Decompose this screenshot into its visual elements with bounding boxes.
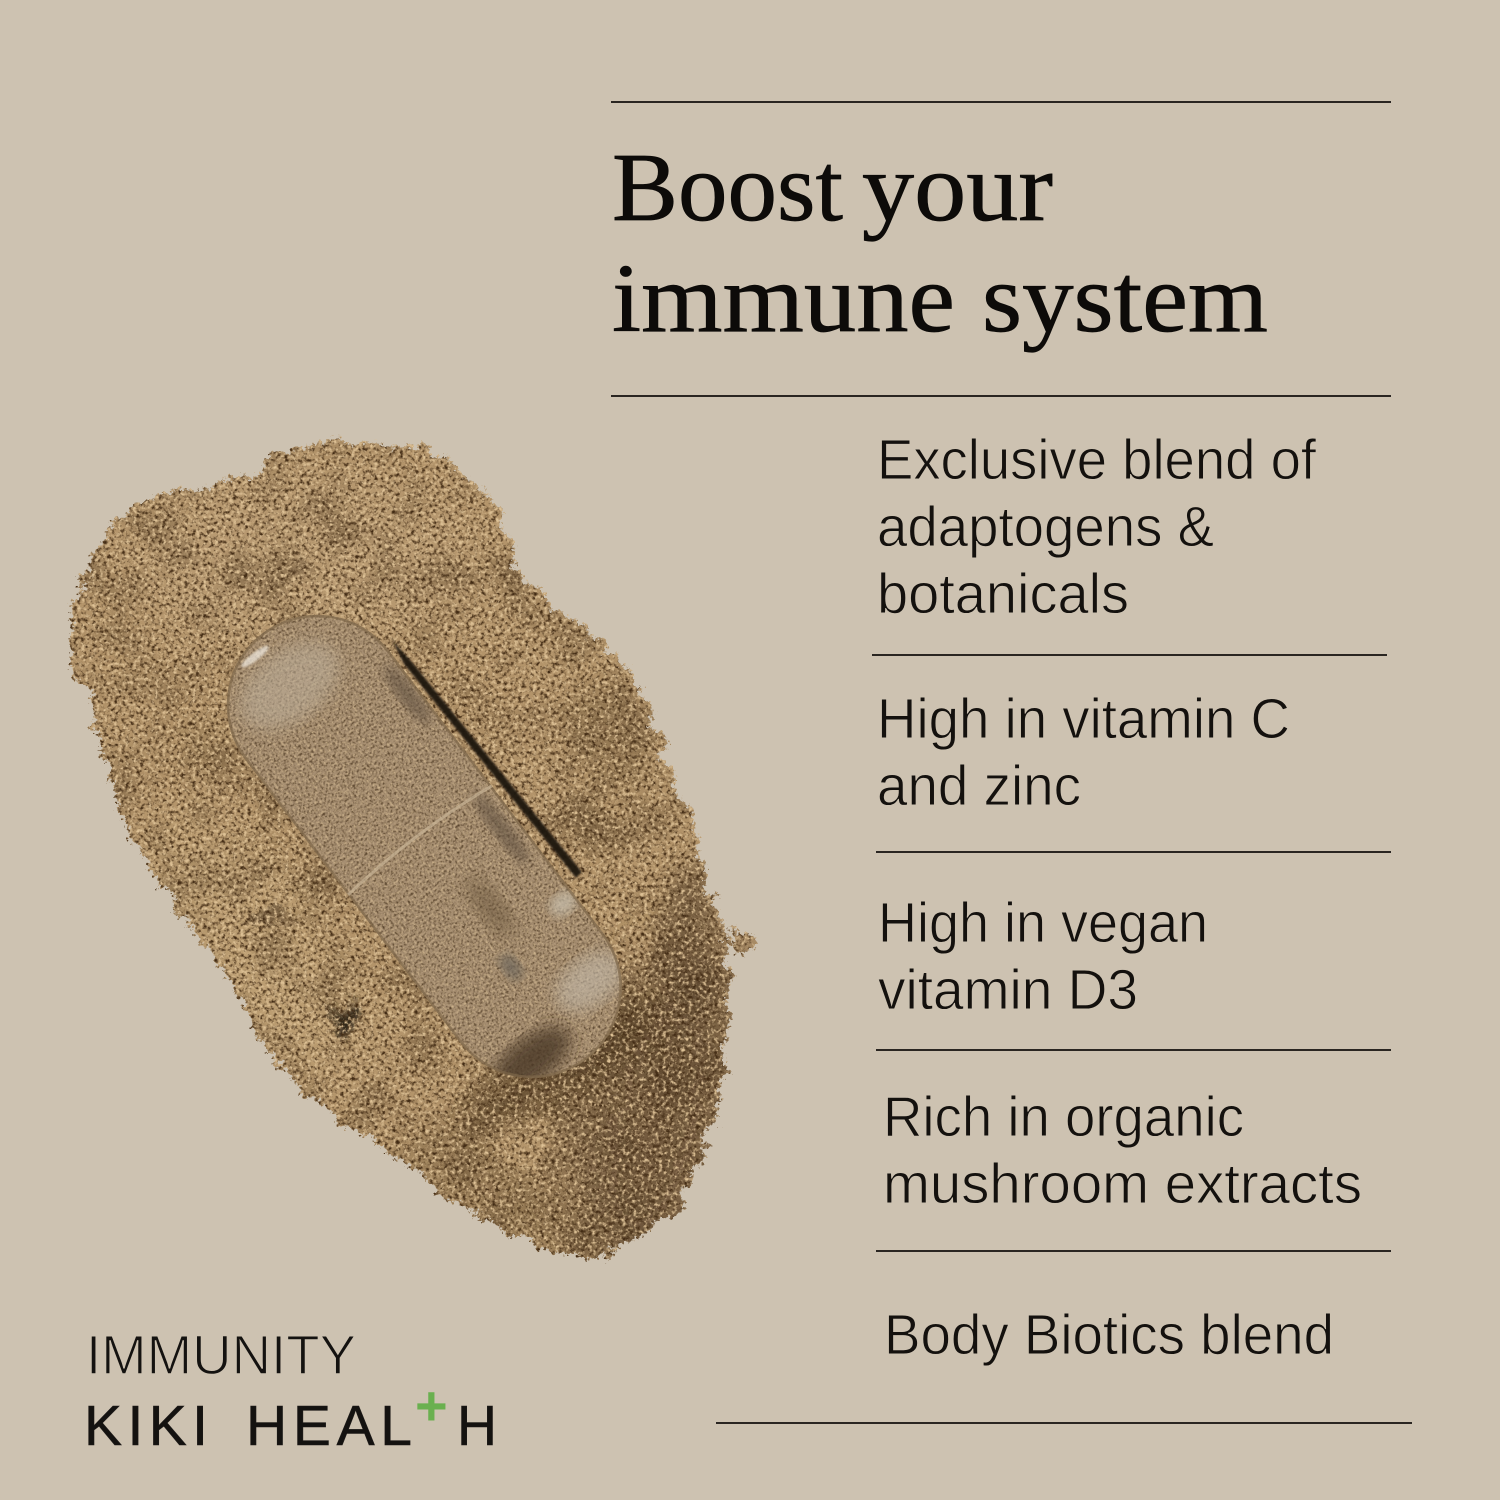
capsule rim — [192, 580, 656, 1112]
product name: IMMUNITY — [86, 1323, 356, 1386]
brand logo: KIKI — [84, 1394, 208, 1458]
brand logo: H — [457, 1394, 497, 1458]
brand logo: HEAL — [246, 1394, 412, 1458]
benefit: organic mushroom extracts — [883, 1085, 1362, 1216]
powder pile — [68, 434, 758, 1264]
title: Boost — [612, 134, 843, 241]
benefit: organic mushroom extracts: Rich in organic — [883, 1085, 1244, 1149]
benefit: vegan vitamin D3 — [878, 891, 1208, 1022]
capsule shading — [236, 636, 620, 1078]
benefit: adaptogens and botanicals — [877, 428, 1316, 626]
title: system — [982, 245, 1268, 352]
benefit: vitamin C and zinc: and zinc — [877, 754, 1081, 818]
benefit: vegan vitamin D3: High in vegan — [878, 891, 1208, 955]
benefit: vegan vitamin D3: vitamin D3 — [878, 958, 1138, 1022]
benefit: body biotics: Body Biotics blend — [884, 1303, 1334, 1367]
benefit: vitamin C and zinc — [877, 687, 1290, 818]
stray clump — [730, 929, 752, 951]
title — [612, 134, 1268, 352]
illustration: capsule on powder — [68, 434, 758, 1264]
rule above title — [611, 101, 1391, 103]
benefit: adaptogens and botanicals: botanicals — [877, 562, 1129, 626]
benefit: adaptogens and botanicals: adaptogens & — [877, 495, 1214, 559]
rule below title — [611, 395, 1391, 397]
capsule — [226, 614, 622, 1078]
benefit: adaptogens and botanicals: Exclusive blend of — [877, 428, 1316, 492]
capsule highlight top — [239, 643, 271, 670]
benefit list — [716, 428, 1412, 1424]
capsule body — [191, 579, 658, 1114]
capsule seam — [345, 782, 491, 895]
brand logo — [84, 1374, 497, 1458]
benefit: organic mushroom extracts: mushroom extracts — [883, 1152, 1362, 1216]
crevice shadow beside capsule — [392, 640, 582, 878]
title: immune — [612, 245, 955, 352]
title: your — [862, 134, 1053, 241]
benefit: vitamin C and zinc: High in vitamin C — [877, 687, 1290, 751]
logo plus sign: + — [415, 1374, 448, 1437]
